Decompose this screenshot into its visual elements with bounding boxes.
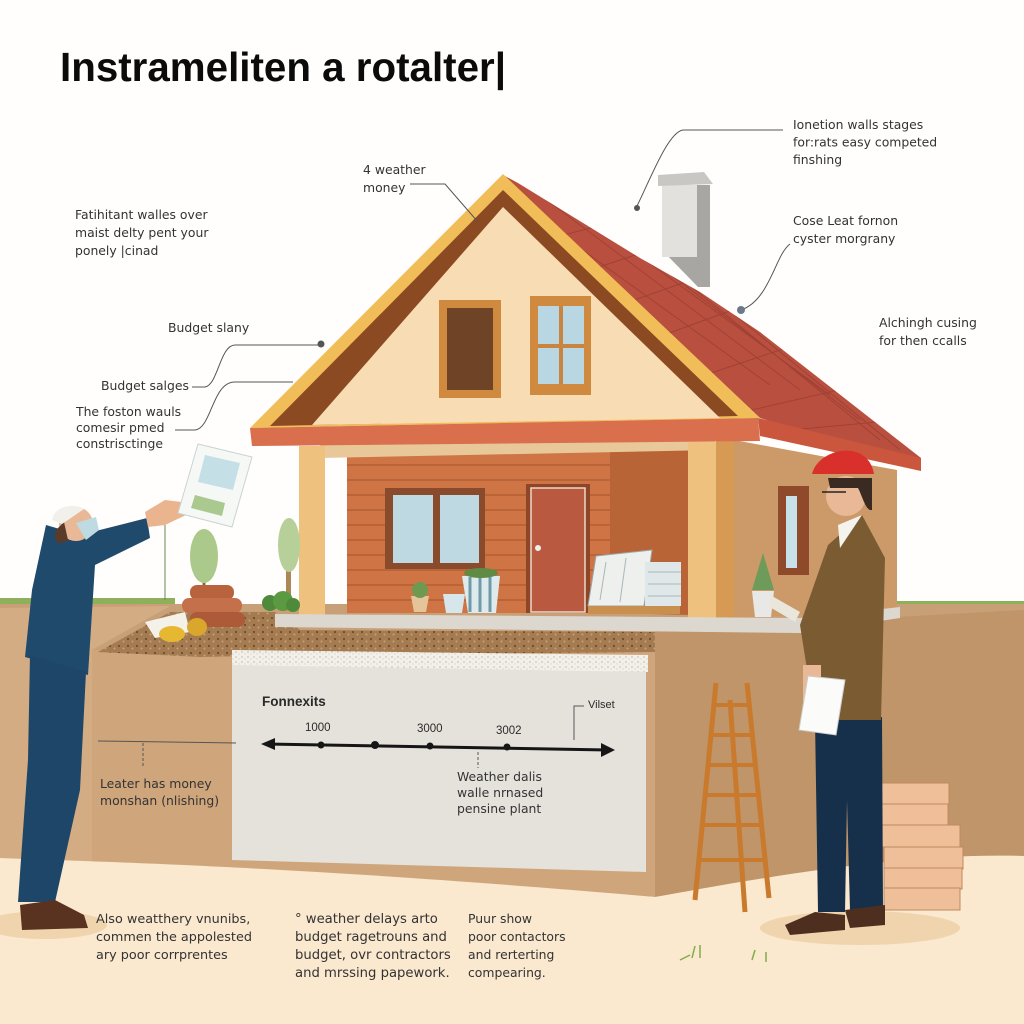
callout: far right: for then ccalls bbox=[879, 333, 967, 348]
bottom text: column 2: and mrssing papework. bbox=[295, 966, 450, 981]
callout: foston walls: comesir pmed bbox=[76, 420, 164, 435]
bricks bbox=[876, 783, 963, 910]
callout: budget salges: Budget salges bbox=[101, 378, 189, 393]
callout: top right: finshing bbox=[793, 152, 842, 167]
chimney bbox=[658, 172, 713, 287]
platform bbox=[275, 607, 900, 633]
ground and excavation bbox=[0, 598, 1024, 1024]
callout: pit left: monshan (nlishing) bbox=[100, 793, 219, 808]
person right: engineer bbox=[768, 451, 885, 935]
panel note: pensine plant bbox=[457, 801, 541, 816]
bottom text: column 2: budget, ovr contractors bbox=[295, 948, 451, 963]
bottom text: column 3: Puur show bbox=[468, 911, 532, 926]
door bbox=[526, 484, 590, 613]
bottom text: column 1: commen the appolested bbox=[96, 930, 252, 945]
callout: roof right: cyster morgrany bbox=[793, 231, 895, 246]
timeline: Vilset bbox=[588, 699, 615, 711]
callout: foston walls: constrisctinge bbox=[76, 436, 163, 451]
callout: foston walls bbox=[75, 382, 293, 451]
panel note: Weather dalis bbox=[457, 769, 542, 784]
callout: upper left: ponely |cinad bbox=[75, 243, 158, 258]
roof right slope bbox=[503, 175, 921, 470]
walls bbox=[347, 446, 610, 613]
bottom text: column 1: ary poor corrprentes bbox=[96, 948, 228, 963]
callouts bbox=[75, 117, 977, 808]
bottom text: column 3: compearing. bbox=[468, 965, 546, 980]
bottom text: column 2: ° weather delays arto bbox=[295, 912, 438, 927]
panel heading: Fonnexits bbox=[262, 694, 326, 709]
callout: foston walls: The foston wauls bbox=[76, 404, 181, 419]
callout: top right: Ionetion walls stages bbox=[793, 117, 923, 132]
foundation soil bbox=[98, 612, 655, 657]
callout: upper left: maist delty pent your bbox=[75, 225, 209, 240]
grass tufts bbox=[680, 945, 766, 962]
callout: pit left bbox=[98, 741, 236, 808]
gable window right bbox=[530, 296, 591, 395]
ladder bbox=[695, 683, 769, 912]
callout: roof weather: 4 weather bbox=[363, 162, 426, 177]
timeline: 3002 bbox=[496, 725, 522, 737]
callout: pit left: Leater has money bbox=[100, 776, 212, 791]
concrete panel bbox=[232, 650, 648, 872]
callout: budget salges bbox=[101, 340, 324, 393]
callout: roof weather: money bbox=[363, 180, 405, 195]
timeline: 3000 bbox=[417, 723, 443, 735]
columns bbox=[299, 446, 325, 615]
blueprint document bbox=[178, 444, 252, 527]
gable window left bbox=[439, 300, 501, 398]
front window bbox=[385, 488, 485, 569]
callout: top right bbox=[634, 117, 937, 211]
timeline bbox=[261, 699, 615, 768]
porch soffit bbox=[320, 440, 715, 458]
timeline: 1000 bbox=[305, 722, 331, 734]
bottom text: column 3: poor contactors bbox=[468, 929, 566, 944]
callout: roof right: Cose Leat fornon bbox=[793, 213, 898, 228]
side window bbox=[778, 486, 809, 575]
callout: upper left: Fatihitant walles over bbox=[75, 207, 208, 222]
title: Instrameliten a rotalter| bbox=[60, 44, 506, 90]
callout: top right: for:rats easy competed bbox=[793, 134, 937, 150]
panel note: walle nrnased bbox=[457, 785, 543, 800]
callout: roof right bbox=[737, 213, 898, 314]
callout: far right: Alchingh cusing bbox=[879, 315, 977, 330]
eave beam bbox=[250, 418, 760, 446]
gable frame bbox=[250, 174, 760, 428]
stacked materials and plants on porch bbox=[411, 550, 774, 617]
logs and trees bbox=[145, 518, 300, 642]
bottom text: column 1: Also weatthery vnunibs, bbox=[96, 912, 250, 927]
callout: roof weather bbox=[363, 162, 478, 222]
person left: inspector bbox=[18, 500, 190, 930]
house bbox=[250, 172, 921, 633]
bottom text: column 3: and rerterting bbox=[468, 947, 554, 962]
callout: budget slany: Budget slany bbox=[168, 320, 249, 335]
bottom text: column 2: budget ragetrouns and bbox=[295, 930, 447, 945]
